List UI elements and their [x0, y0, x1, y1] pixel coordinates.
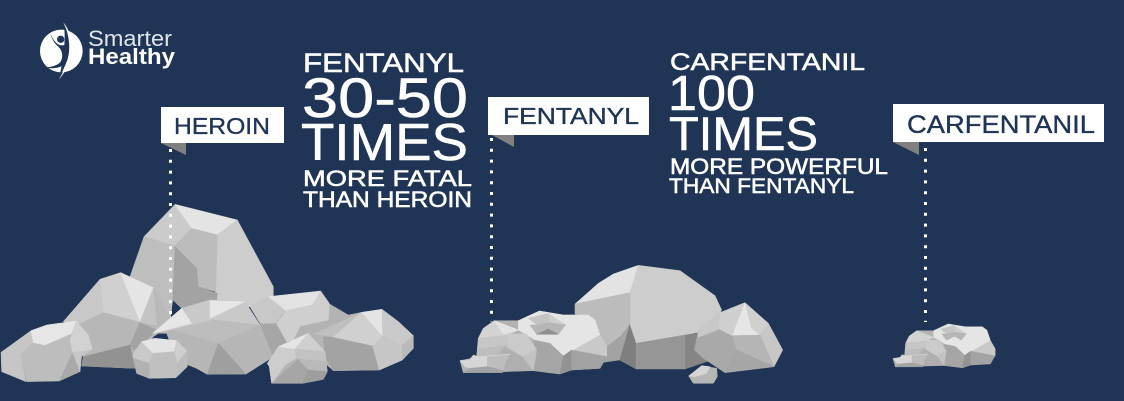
logo text: Smarter: Smarter	[88, 26, 172, 51]
heading: fentanyl comparison: MORE FATAL	[303, 166, 472, 191]
logo text: Healthy: Healthy	[88, 44, 176, 69]
heading: carfentanil comparison: 100	[668, 67, 755, 121]
rock pile: fentanyl	[460, 265, 783, 383]
heading: carfentanil comparison	[668, 49, 888, 198]
heading: fentanyl comparison: THAN HEROIN	[303, 187, 472, 212]
label: carfentanil	[893, 104, 1104, 155]
heading: fentanyl comparison	[301, 48, 472, 212]
label: heroin	[161, 107, 284, 155]
heading: fentanyl comparison: 30-50	[302, 66, 468, 129]
logo: Smarter Healthy	[40, 22, 176, 80]
rock pile: heroin	[1, 204, 413, 383]
dotted line: carfentanil	[924, 148, 927, 322]
heading: fentanyl comparison: FENTANYL	[303, 48, 464, 78]
heading: carfentanil comparison: MORE POWERFUL	[670, 154, 888, 179]
heading: fentanyl comparison: TIMES	[301, 114, 468, 172]
heading: carfentanil comparison: CARFENTANIL	[670, 49, 865, 76]
label: heroin: HEROIN	[174, 113, 270, 139]
heading: carfentanil comparison: THAN FENTANYL	[669, 175, 854, 198]
heading: carfentanil comparison: TIMES	[669, 108, 818, 161]
icon: figure in circle	[40, 22, 83, 80]
dotted line: heroin	[169, 149, 172, 322]
label: fentanyl: FENTANYL	[503, 103, 639, 129]
dotted line: fentanyl	[490, 138, 493, 322]
rock pile: carfentanil	[893, 324, 995, 368]
label: fentanyl	[488, 97, 649, 147]
label: carfentanil: CARFENTANIL	[907, 111, 1095, 139]
